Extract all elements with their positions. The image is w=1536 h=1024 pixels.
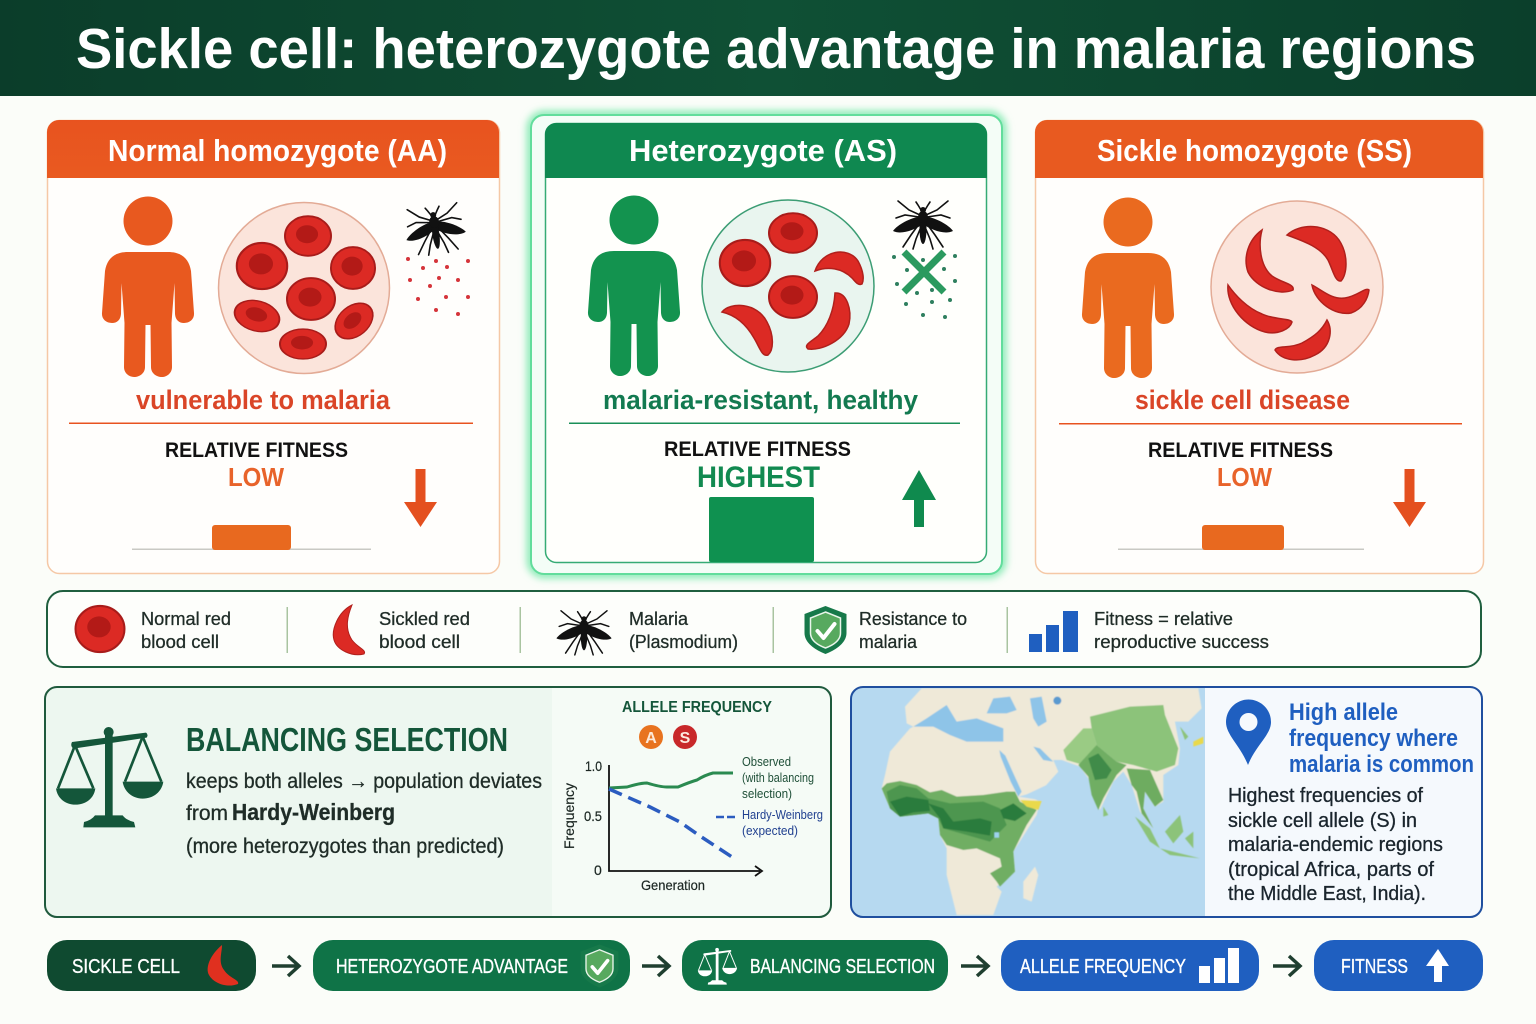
status text: sickle cell disease: [1135, 385, 1350, 415]
chart: allele frequency: Observed: [742, 755, 791, 769]
flow step: heterozygote advantage: HETEROZYGOTE ADVANTAGE: [336, 956, 568, 978]
map description: sickle cell allele (S) in: [1228, 810, 1417, 832]
allele badges: S: [680, 730, 691, 747]
fitness value: LOW: [228, 462, 284, 492]
legend item: malaria: (Plasmodium): [629, 631, 738, 652]
icon: person: [1082, 198, 1174, 378]
legend item: resistance: malaria: [859, 631, 918, 652]
fitness label: RELATIVE FITNESS: [664, 438, 851, 461]
chart: allele frequency: Generation: [641, 877, 705, 893]
panel: allele map: [851, 687, 1482, 917]
chart: allele frequency: 0: [594, 862, 602, 878]
legend item: resistance: Resistance to: [859, 608, 967, 629]
card heading: Heterozygote (AS): [629, 133, 897, 168]
title: Sickle cell: heterozygote advantage in malaria regions: [76, 17, 1476, 81]
balancing description: Hardy-Weinberg: [232, 799, 395, 825]
card heading: [1035, 120, 1483, 178]
balancing description: (more heterozygotes than predicted): [186, 835, 504, 858]
arrow: [642, 956, 669, 976]
arrow: down: [1393, 469, 1426, 527]
balancing heading: BALANCING SELECTION: [186, 721, 508, 758]
chart: allele frequency: selection): [742, 787, 792, 801]
icon: person: [588, 196, 680, 376]
legend item: malaria: [556, 608, 738, 655]
arrow: [272, 956, 299, 976]
map heading: malaria is common: [1289, 751, 1474, 778]
sickled cells circle: [1211, 201, 1383, 373]
flow step: allele frequency: [1001, 940, 1259, 991]
flow step: fitness: [1314, 940, 1483, 991]
legend item: normal red blood cell: blood cell: [141, 631, 219, 652]
flow step: allele frequency: ALLELE FREQUENCY: [1020, 956, 1186, 978]
fitness label: RELATIVE FITNESS: [165, 439, 348, 462]
chart: allele frequency: 0.5: [584, 808, 602, 824]
map description: (tropical Africa, parts of: [1228, 859, 1434, 881]
fitness label: RELATIVE FITNESS: [1148, 439, 1333, 462]
fitness bar: [132, 525, 371, 550]
chart: allele frequency: (with balancing: [742, 771, 814, 785]
map description: malaria-endemic regions: [1228, 834, 1443, 856]
icon: person: [102, 196, 194, 377]
fitness bar: [1118, 525, 1364, 550]
card heading: Sickle homozygote (SS): [1097, 133, 1412, 168]
fitness value: HIGHEST: [697, 461, 820, 494]
card heading: [47, 120, 499, 178]
icon: location pin: [1226, 700, 1271, 765]
legend item: sickled red blood cell: [333, 605, 470, 655]
icon: scales: [56, 727, 163, 827]
blood cells circle: [702, 200, 874, 372]
legend item: normal red blood cell: Normal red: [141, 608, 231, 629]
legend item: sickled red blood cell: blood cell: [379, 631, 460, 652]
chart: allele frequency: [561, 699, 823, 893]
legend: [47, 591, 1481, 667]
allele badges: A: [645, 730, 657, 747]
map heading: frequency where: [1289, 725, 1458, 752]
arrow: down: [404, 469, 437, 527]
fitness value: LOW: [1217, 462, 1272, 492]
legend item: sickled red blood cell: Sickled red: [379, 608, 470, 629]
panel: normal homozygote AA: [47, 120, 500, 574]
card heading: Normal homozygote (AA): [108, 133, 447, 168]
panel: heterozygote AS: [531, 115, 1002, 574]
arrow: up: [902, 470, 936, 527]
chart: allele frequency: ALLELE FREQUENCY: [622, 699, 772, 716]
legend item: malaria: Malaria: [629, 608, 689, 629]
flow step: balancing selection: [682, 940, 948, 991]
legend item: fitness: Fitness = relative: [1094, 608, 1233, 629]
flow step: sickle cell: [47, 940, 256, 991]
icon: mosquito blocked: [892, 201, 957, 319]
balancing description: from: [186, 802, 228, 825]
status text: vulnerable to malaria: [136, 385, 391, 415]
map heading: High allele: [1289, 699, 1398, 726]
icon: mosquito with parasites: [402, 202, 470, 316]
allele badges: [639, 725, 697, 749]
legend item: resistance: [804, 606, 967, 654]
flow step: balancing selection: BALANCING SELECTION: [750, 956, 935, 978]
legend item: fitness: reproductive success: [1094, 631, 1269, 652]
balancing description: keeps both alleles → population deviates: [186, 770, 542, 793]
flow step: heterozygote advantage: [313, 940, 630, 991]
chart: allele frequency: (expected): [742, 824, 798, 838]
map of malaria regions: [851, 687, 1205, 917]
map description: Highest frequencies of: [1228, 785, 1423, 807]
chart: allele frequency: Hardy-Weinberg: [742, 808, 823, 822]
flow step: fitness: FITNESS: [1341, 956, 1408, 978]
panel: sickle homozygote SS: [1035, 120, 1484, 574]
title: [0, 0, 1536, 96]
fitness bar: [709, 497, 814, 562]
arrow: [961, 956, 988, 976]
legend item: fitness: [1029, 608, 1269, 652]
panel: balancing selection: [45, 687, 831, 917]
card heading: [545, 123, 987, 178]
legend item: normal red blood cell: [76, 606, 231, 652]
flow step: sickle cell: SICKLE CELL: [72, 956, 180, 978]
chart: allele frequency: Frequency: [561, 783, 577, 849]
map description: the Middle East, India).: [1228, 883, 1426, 905]
status text: malaria-resistant, healthy: [603, 385, 918, 415]
blood cells circle: [218, 202, 390, 374]
arrow: [1273, 956, 1300, 976]
chart: allele frequency: 1.0: [585, 758, 602, 774]
